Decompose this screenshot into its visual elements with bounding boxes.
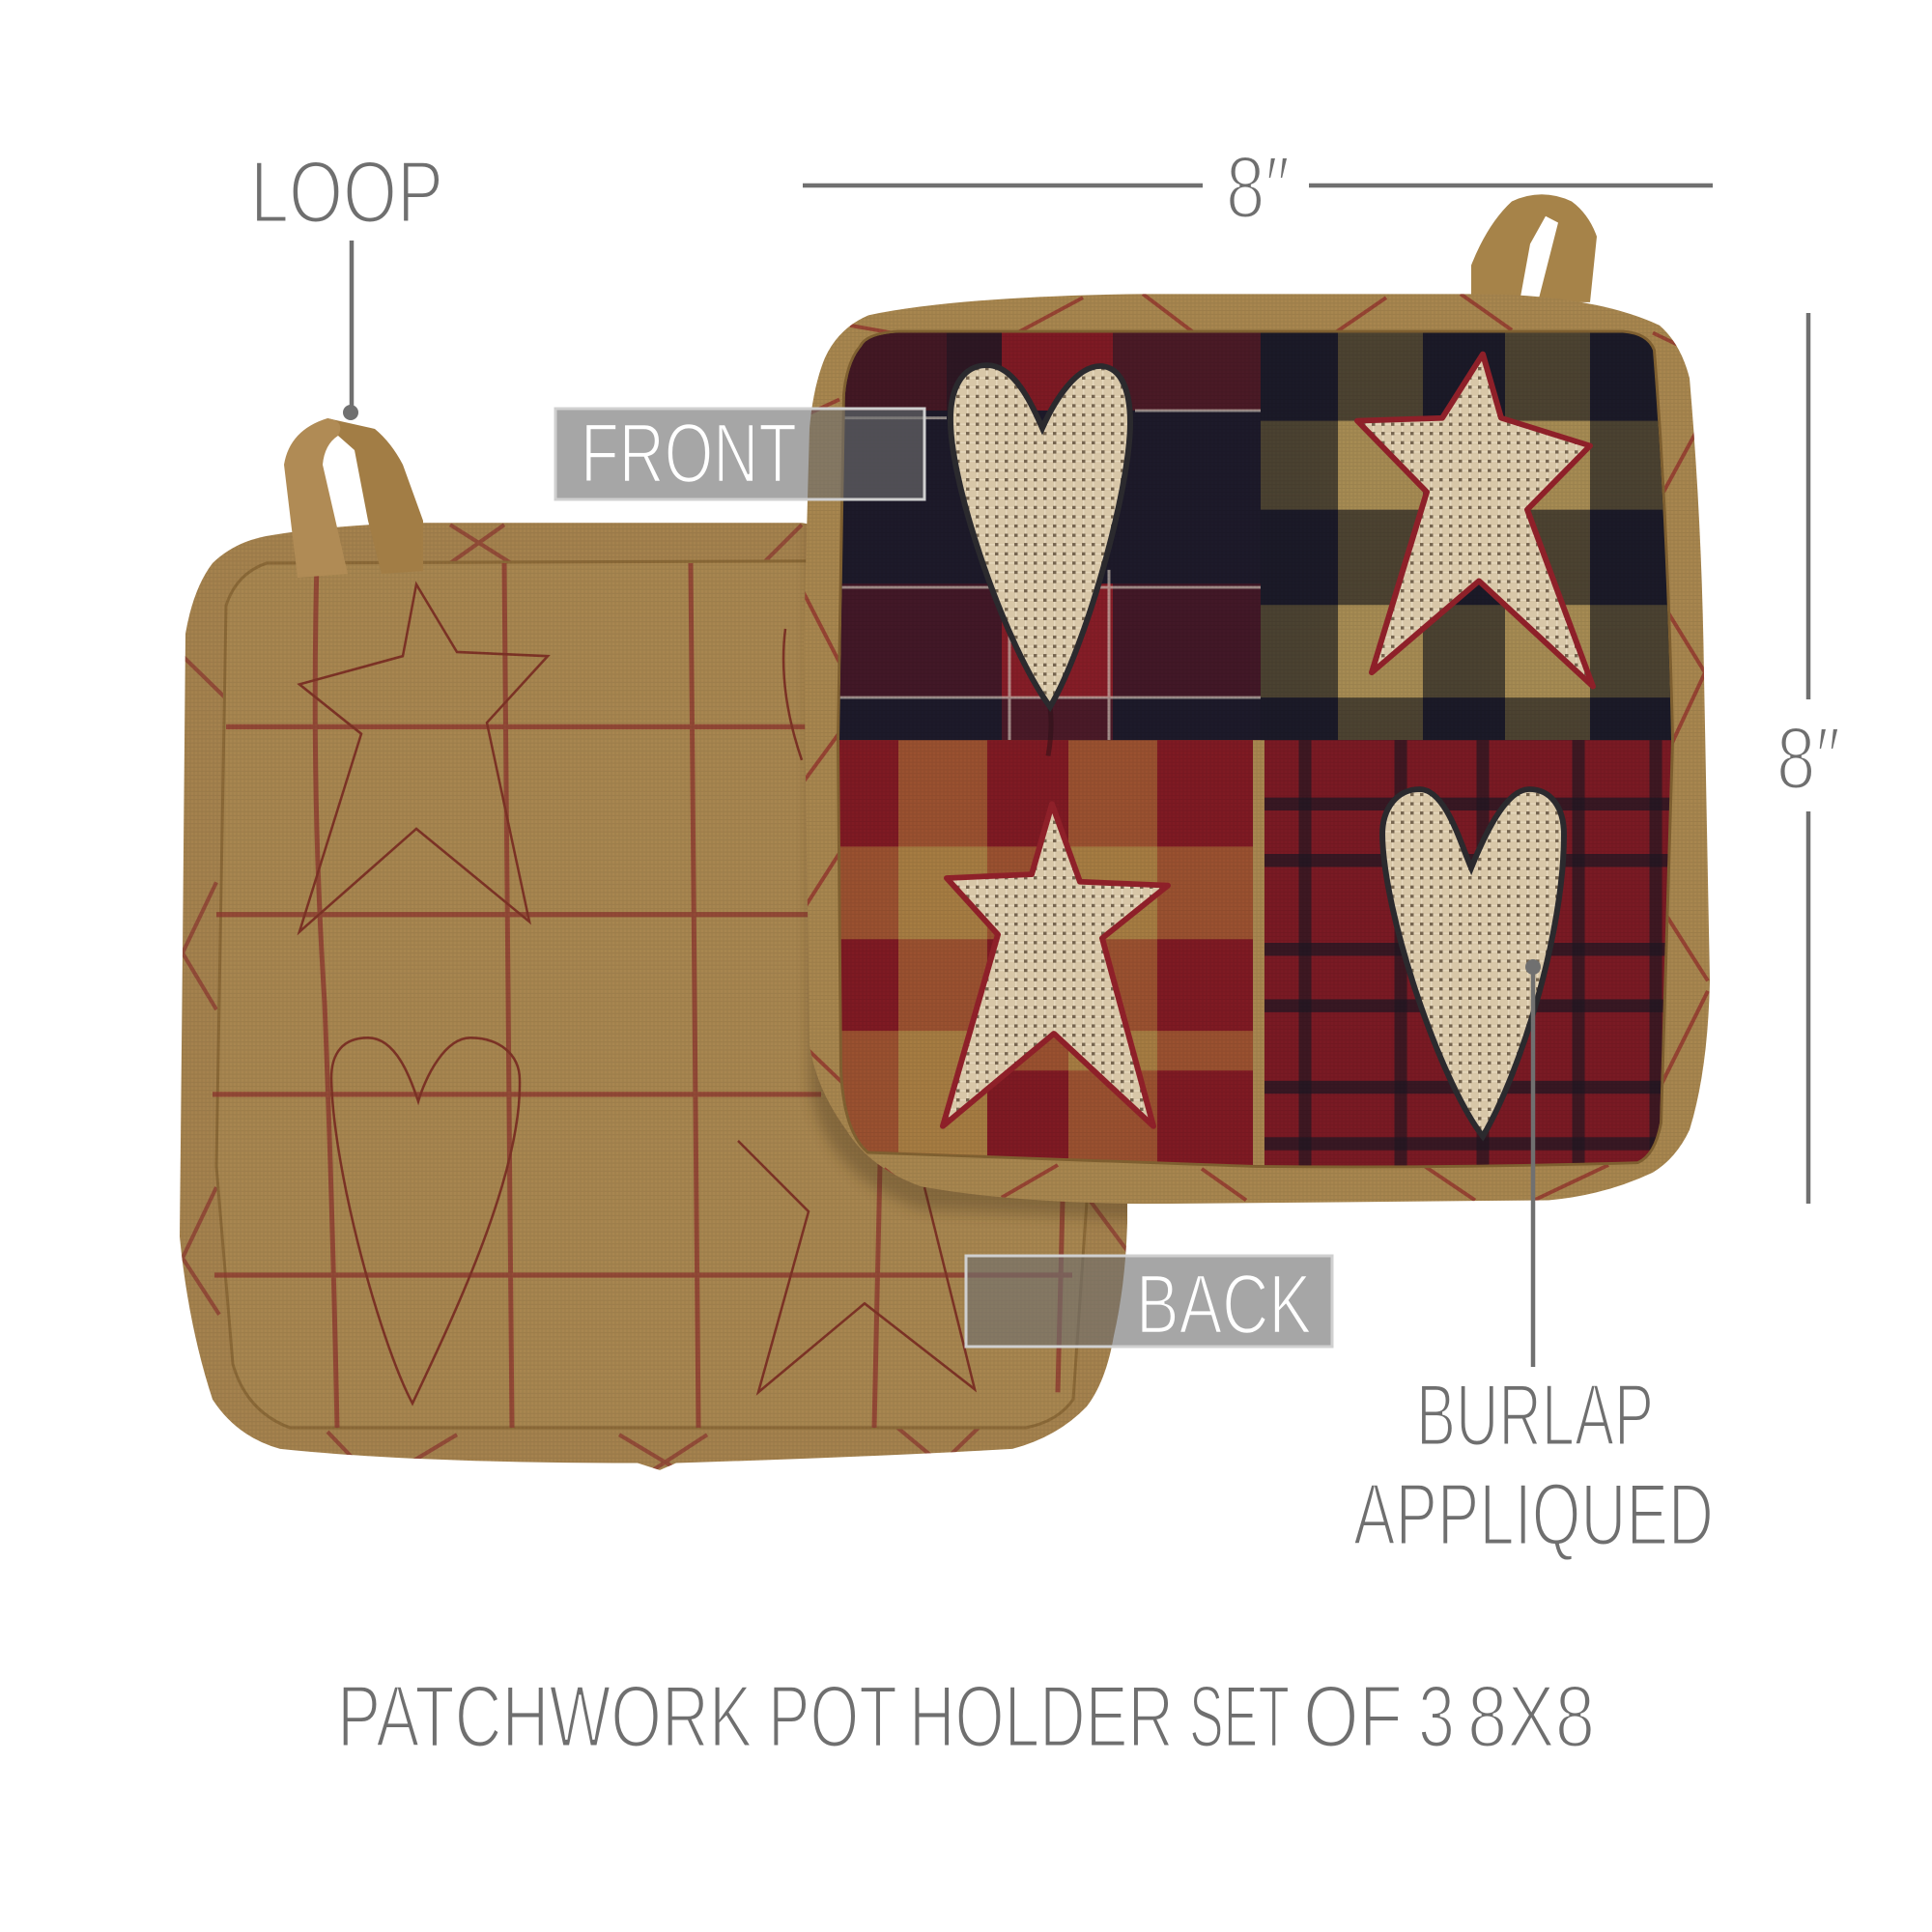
callout: burlap appliqued [1353,959,1714,1564]
dimension: height 8 inches: 8″ [1776,710,1840,808]
panel: front pot holder [792,194,1719,1209]
shadow of front holder [810,507,1143,1220]
patch: red and navy plaid [1264,740,1681,1176]
quilted heart [331,1037,520,1404]
icon: burlap star top right [1357,355,1593,687]
title: 8X8 [1467,1668,1595,1766]
callout: loop [250,144,443,420]
title: POT [768,1668,897,1766]
title: PATCHWORK [337,1668,753,1766]
callout: loop: LOOP [250,144,443,242]
callout: burlap appliqued: APPLIQUED [1353,1466,1714,1564]
title: OF [1303,1668,1403,1766]
panel: back pot holder [164,418,1143,1488]
patch: plum and navy plaid [831,326,1261,742]
label: front: FRONT [581,407,797,500]
quilted star lower [738,1141,975,1392]
patch: navy and tan buffalo check [1261,326,1681,742]
title [337,1668,1595,1766]
title: HOLDER [909,1668,1174,1766]
icon: burlap star bottom left [943,804,1168,1126]
icon: burlap heart bottom right [1382,789,1564,1136]
plaid stripes [213,563,1072,1428]
title: SET [1189,1668,1290,1766]
patch: red and tan check [831,740,1264,1176]
front holder binding [792,284,1719,1209]
icon: front hanging loop [1471,194,1597,302]
dimension: width 8 inches: 8″ [1226,139,1290,237]
callout: burlap appliqued: BURLAP [1416,1367,1654,1464]
quilt pucker [1048,707,1051,755]
quilted star top [299,584,548,932]
patchwork squares [831,326,1681,1177]
label: back: BACK [1136,1258,1312,1351]
icon: back hanging loop [284,418,423,578]
title: 3 [1418,1668,1455,1766]
label: back [966,1256,1332,1351]
icon: burlap heart top left [951,365,1130,707]
back holder body [164,507,1143,1488]
